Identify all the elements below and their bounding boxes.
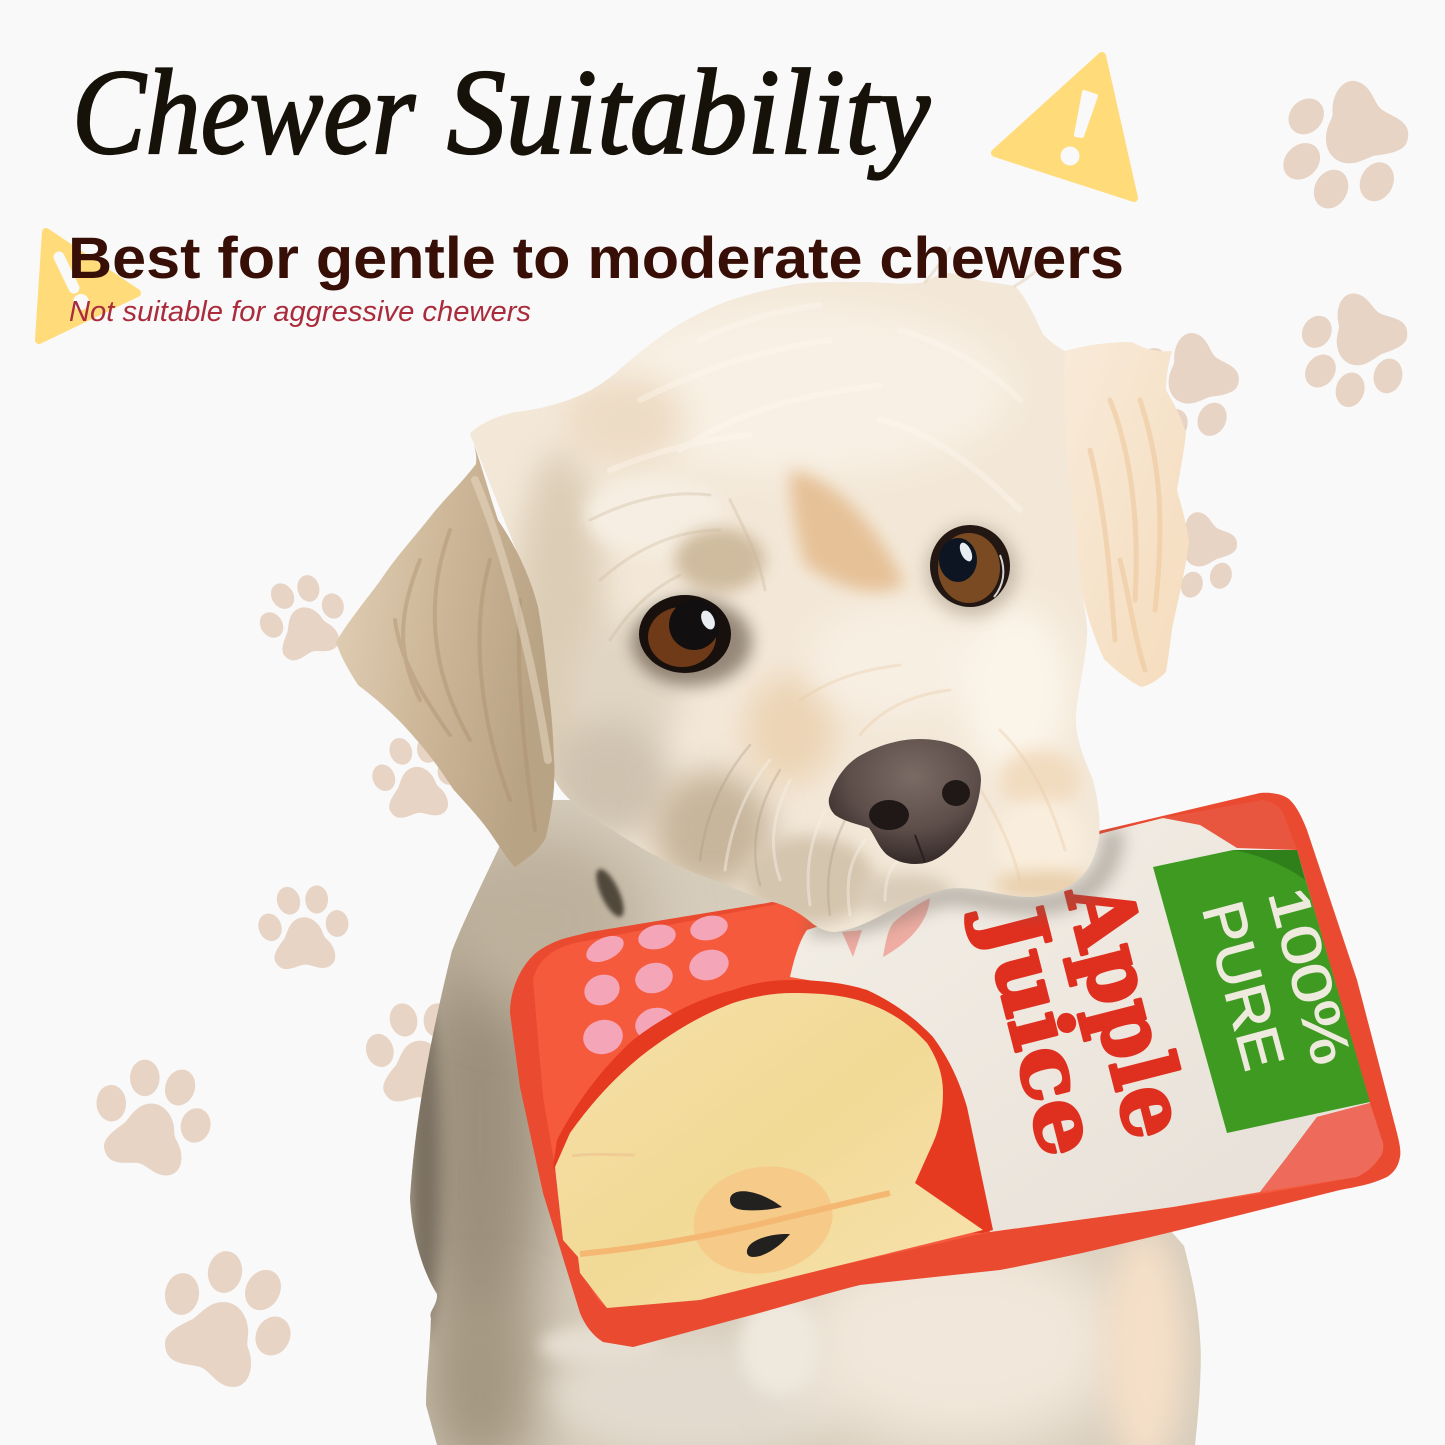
dog right ear bbox=[1064, 342, 1189, 687]
warning triangle icon: top right bbox=[995, 56, 1134, 198]
dog left ear bbox=[336, 433, 555, 867]
title bbox=[72, 45, 931, 180]
toy bottom corner panel bbox=[1260, 1103, 1383, 1192]
toy cream label bbox=[790, 818, 1370, 1232]
toy text: Apple Juice bbox=[961, 872, 1210, 1165]
toy polka dots bbox=[579, 912, 732, 1059]
toy top corner shade bbox=[1163, 800, 1297, 850]
toy: apple juice box plush bbox=[510, 793, 1400, 1347]
toy green badge: PURE bbox=[1189, 895, 1296, 1077]
dog nose bbox=[829, 739, 981, 864]
dog head bbox=[336, 248, 1189, 950]
toy text: Apple Juice: Juice bbox=[961, 891, 1120, 1165]
muzzle shadow on toy bbox=[810, 830, 1113, 925]
title: Suitability bbox=[447, 45, 931, 180]
toy red panel bbox=[533, 800, 1383, 1308]
dog right eye bbox=[926, 524, 1018, 616]
toy green badge bbox=[1153, 850, 1370, 1133]
warning triangle icon: behind subtitle bbox=[39, 232, 137, 340]
dog left eye bbox=[632, 595, 752, 686]
title: Chewer bbox=[72, 45, 415, 180]
head base with fur shading bbox=[460, 270, 1120, 950]
toy pink leaves bbox=[842, 898, 930, 957]
warning note: Not suitable for aggressive chewers bbox=[69, 296, 531, 328]
toy green badge: 100% bbox=[1256, 880, 1363, 1071]
subtitle: Best for gentle to moderate chewers bbox=[68, 226, 1124, 291]
toy text: Apple Juice: Apple bbox=[1045, 872, 1210, 1148]
toy apple slice bbox=[553, 980, 993, 1308]
dog body bbox=[400, 780, 1220, 1445]
fur strands bbox=[590, 248, 1065, 915]
toy base bbox=[510, 793, 1400, 1347]
